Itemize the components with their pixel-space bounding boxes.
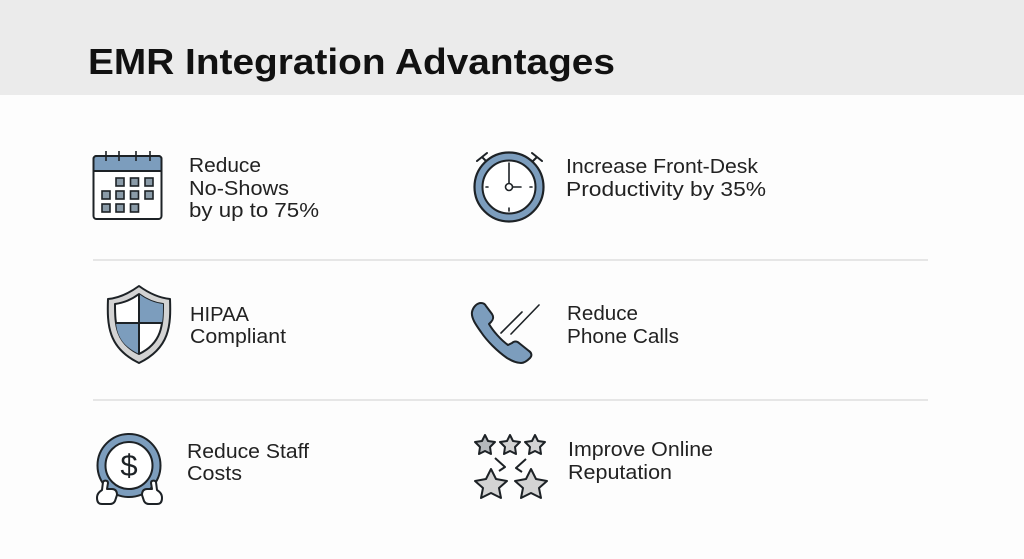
label: reduce staff costs: Reduce Staff bbox=[187, 440, 309, 463]
item: reduce phone calls bbox=[472, 302, 679, 363]
icon: dollar coin with thumbs bbox=[97, 434, 162, 504]
label: hipaa compliant bbox=[190, 303, 286, 348]
header band bbox=[0, 0, 1024, 95]
icon: stopwatch bbox=[474, 152, 544, 222]
label: reduce staff costs: Costs bbox=[187, 462, 242, 485]
item: improve online reputation bbox=[475, 435, 713, 498]
item: front-desk productivity bbox=[474, 152, 766, 222]
label: hipaa compliant: Compliant bbox=[190, 325, 286, 348]
label: reduce phone calls: Phone Calls bbox=[567, 325, 679, 348]
icon: shield bbox=[108, 286, 170, 363]
item: hipaa compliant bbox=[108, 286, 286, 363]
label: reduce staff costs bbox=[187, 440, 309, 485]
label: hipaa compliant: HIPAA bbox=[190, 303, 249, 326]
item: reduce staff costs bbox=[97, 434, 309, 504]
title: EMR Integration Advantages bbox=[88, 41, 615, 82]
label: reduce no-shows: Reduce bbox=[189, 154, 261, 177]
label: front-desk productivity: Increase Front-Desk bbox=[566, 155, 759, 178]
label: front-desk productivity: Productivity by 35% bbox=[566, 178, 766, 201]
label: improve online reputation: Improve Online bbox=[568, 438, 713, 461]
icon: phone bbox=[472, 303, 539, 363]
label: reduce no-shows: No-Shows bbox=[189, 177, 289, 200]
label: front-desk productivity bbox=[566, 155, 766, 201]
label: reduce phone calls: Reduce bbox=[567, 302, 638, 325]
item: reduce no-shows bbox=[94, 151, 319, 222]
icon: dollar coin with thumbs: $ bbox=[120, 448, 138, 483]
label: reduce no-shows: by up to 75% bbox=[189, 199, 319, 222]
label: improve online reputation bbox=[568, 438, 713, 484]
label: improve online reputation: Reputation bbox=[568, 461, 672, 484]
label: reduce no-shows bbox=[189, 154, 319, 222]
label: reduce phone calls bbox=[567, 302, 679, 348]
icon: calendar bbox=[94, 151, 162, 219]
icon: stars bbox=[475, 435, 547, 498]
